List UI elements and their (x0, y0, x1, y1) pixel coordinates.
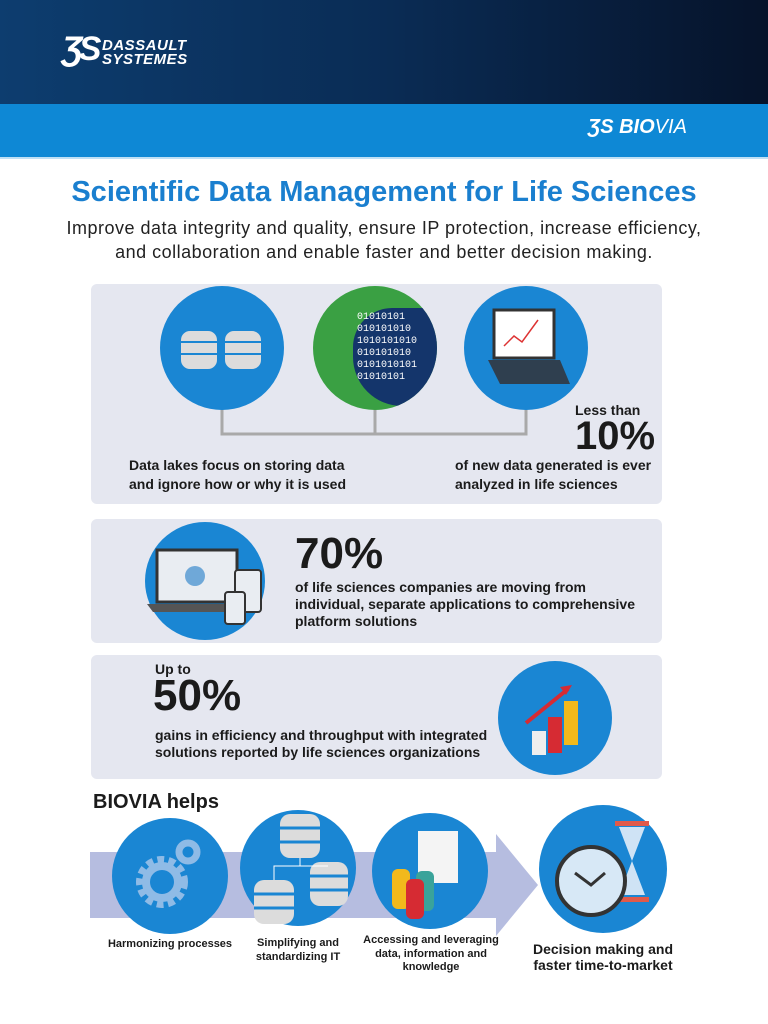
text: solutions reported by life sciences organizations (155, 744, 480, 760)
label: accessing: Accessing and leveraging data, information and knowledge (363, 934, 499, 973)
text: individual, separate applications to comprehensive (295, 596, 635, 612)
icon: green globe with binary: 010101010 (357, 348, 411, 359)
blue band with BIOVIA logo (0, 104, 768, 159)
stat: less than 10%: Less than (575, 402, 640, 418)
step: harmonizing (112, 818, 228, 934)
step: decision making (539, 805, 667, 933)
panel: 50%: 50% (153, 671, 241, 720)
text: new data (455, 457, 651, 492)
connector lines (220, 410, 528, 436)
icon: laptop (464, 286, 588, 410)
label: simplifying: Simplifying and standardizing IT (256, 937, 340, 963)
text (295, 579, 635, 629)
icon: green globe with binary: 1010101010 (357, 336, 417, 347)
text: new data: of new data generated is ever (455, 457, 651, 473)
subtitle: and collaboration and enable faster and better decision making. (115, 242, 653, 262)
icon: green globe with binary: 0101010101 (357, 360, 417, 371)
text: data lakes (129, 457, 346, 492)
subtitle (66, 218, 702, 262)
label: decision: Decision making and faster time-to-market (533, 941, 673, 973)
header band (0, 0, 768, 104)
stat: 70%: 70% (295, 529, 383, 578)
icon: databases (160, 286, 284, 410)
heading: BIOVIA helps: BIOVIA helps (93, 791, 219, 813)
icon: green globe with binary: 010101010 (357, 324, 411, 335)
text: gains in efficiency and throughput with integrated (155, 727, 487, 743)
text: data lakes: Data lakes focus on storing data (129, 457, 344, 473)
stat: up to 50%: Up to (155, 661, 191, 677)
panel: data lakes: 10% (575, 414, 655, 458)
logo: Dassault Systemes: DASSAULT (102, 37, 187, 54)
panel: 70% (91, 519, 662, 643)
panel: 50% (91, 655, 662, 779)
icon: green globe with binary: 01010101 (357, 312, 405, 323)
logo: Dassault Systemes: SYSTEMES (102, 51, 188, 68)
step: simplifying IT (240, 810, 356, 926)
icon: bar chart (498, 661, 612, 775)
text: platform solutions (295, 613, 417, 629)
panel: data lakes (91, 284, 662, 504)
text (155, 727, 487, 760)
title: Scientific Data Management for Life Sciences (71, 176, 697, 208)
logo: Dassault Systemes: ƷS (62, 30, 97, 68)
text: data lakes: and ignore how or why it is used (129, 476, 346, 492)
icon: devices (145, 522, 265, 640)
logo: Dassault Systemes (60, 30, 188, 68)
step: accessing data (372, 813, 488, 929)
icon: green globe with binary: 01010101 (357, 372, 405, 383)
text: new data: analyzed in life sciences (455, 476, 618, 492)
subtitle: Improve data integrity and quality, ensure IP protection, increase efficiency, (66, 218, 702, 238)
arrow (90, 834, 538, 936)
blue band with BIOVIA logo: ƷS BIOVIA (588, 116, 687, 138)
icon: green globe with binary (313, 286, 437, 410)
label: harmonizing: Harmonizing processes (108, 938, 232, 950)
text: of life sciences companies are moving from (295, 579, 586, 595)
